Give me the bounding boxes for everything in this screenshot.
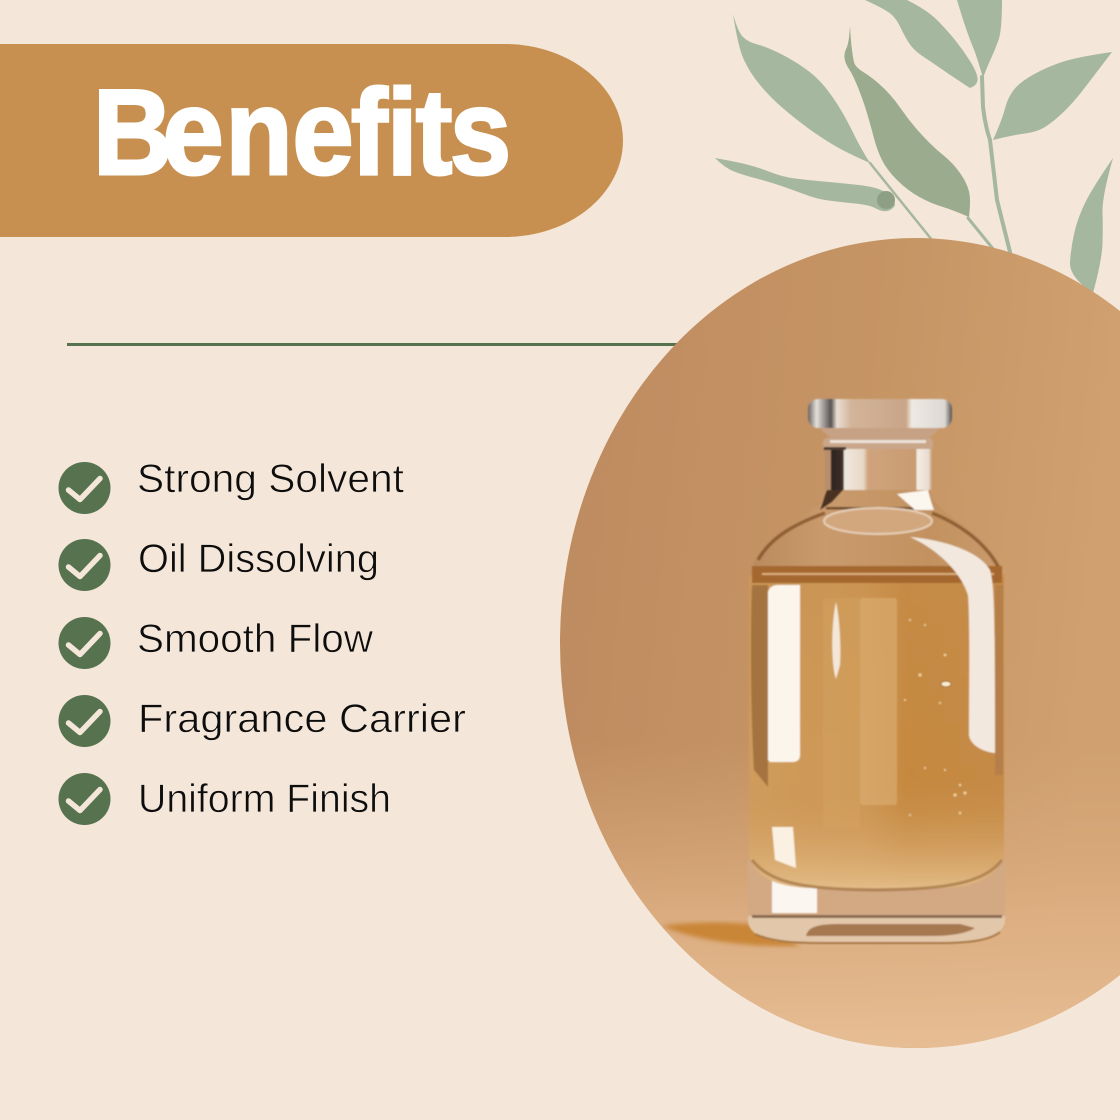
neck lower reflection xyxy=(897,490,934,510)
leaf: right xyxy=(993,52,1112,140)
leaf: top right small xyxy=(957,0,1002,78)
item: Oil Dissolving: Oil Dissolving xyxy=(138,537,379,581)
leaf: centre large xyxy=(844,26,970,217)
small centre highlight xyxy=(832,602,840,679)
liquid bottom rim xyxy=(752,860,1002,890)
base highlight xyxy=(772,880,817,913)
stems xyxy=(870,77,1010,252)
leaf: horizontal lower xyxy=(715,158,895,211)
item: Uniform Finish xyxy=(58,773,391,825)
leaf: top centre xyxy=(865,0,978,88)
glass base xyxy=(748,860,1004,916)
lower left highlight xyxy=(772,827,796,868)
neck lower left dark xyxy=(820,490,843,510)
leaf: upper left xyxy=(733,14,870,163)
right edge band xyxy=(995,585,1003,775)
item: Strong Solvent xyxy=(58,457,404,514)
title banner xyxy=(0,44,623,237)
base rim line xyxy=(755,932,1000,943)
benefits list xyxy=(58,457,466,825)
shoulder glass xyxy=(749,490,1004,590)
cap xyxy=(808,399,952,428)
neck xyxy=(825,448,932,490)
specks xyxy=(904,619,966,816)
item: Fragrance Carrier: Fragrance Carrier xyxy=(138,697,466,741)
left dark band xyxy=(751,585,768,787)
item: Uniform Finish: Uniform Finish xyxy=(138,777,391,821)
item: Oil Dissolving xyxy=(58,537,379,591)
divider line xyxy=(67,343,679,346)
item: Smooth Flow xyxy=(58,617,373,669)
shoulder inner dark edge xyxy=(758,513,1000,570)
item: Strong Solvent: Strong Solvent xyxy=(137,457,404,501)
leaf: far right xyxy=(1070,158,1113,293)
neck floor line xyxy=(826,507,932,510)
left highlight xyxy=(768,585,800,762)
photo backdrop xyxy=(550,230,1120,1060)
heading: Benefits: Benefits xyxy=(93,64,511,200)
neck ring xyxy=(823,438,933,449)
item: Smooth Flow: Smooth Flow xyxy=(137,617,373,661)
bottle xyxy=(748,399,1005,943)
liquid xyxy=(749,575,1004,888)
cap underside xyxy=(820,428,940,440)
inner bubble xyxy=(824,508,932,534)
base lower band xyxy=(748,916,1005,943)
air bubble xyxy=(941,681,951,687)
bottle shadow xyxy=(662,922,800,946)
liquid surface xyxy=(752,566,1002,583)
liquid centre panel xyxy=(860,598,897,805)
right highlight xyxy=(910,537,995,753)
oval photo with bottle xyxy=(550,230,1120,1060)
item: Fragrance Carrier xyxy=(58,695,466,747)
leaf joint knob xyxy=(877,191,895,209)
decorative leaves xyxy=(715,0,1113,293)
banner shape xyxy=(0,44,623,237)
